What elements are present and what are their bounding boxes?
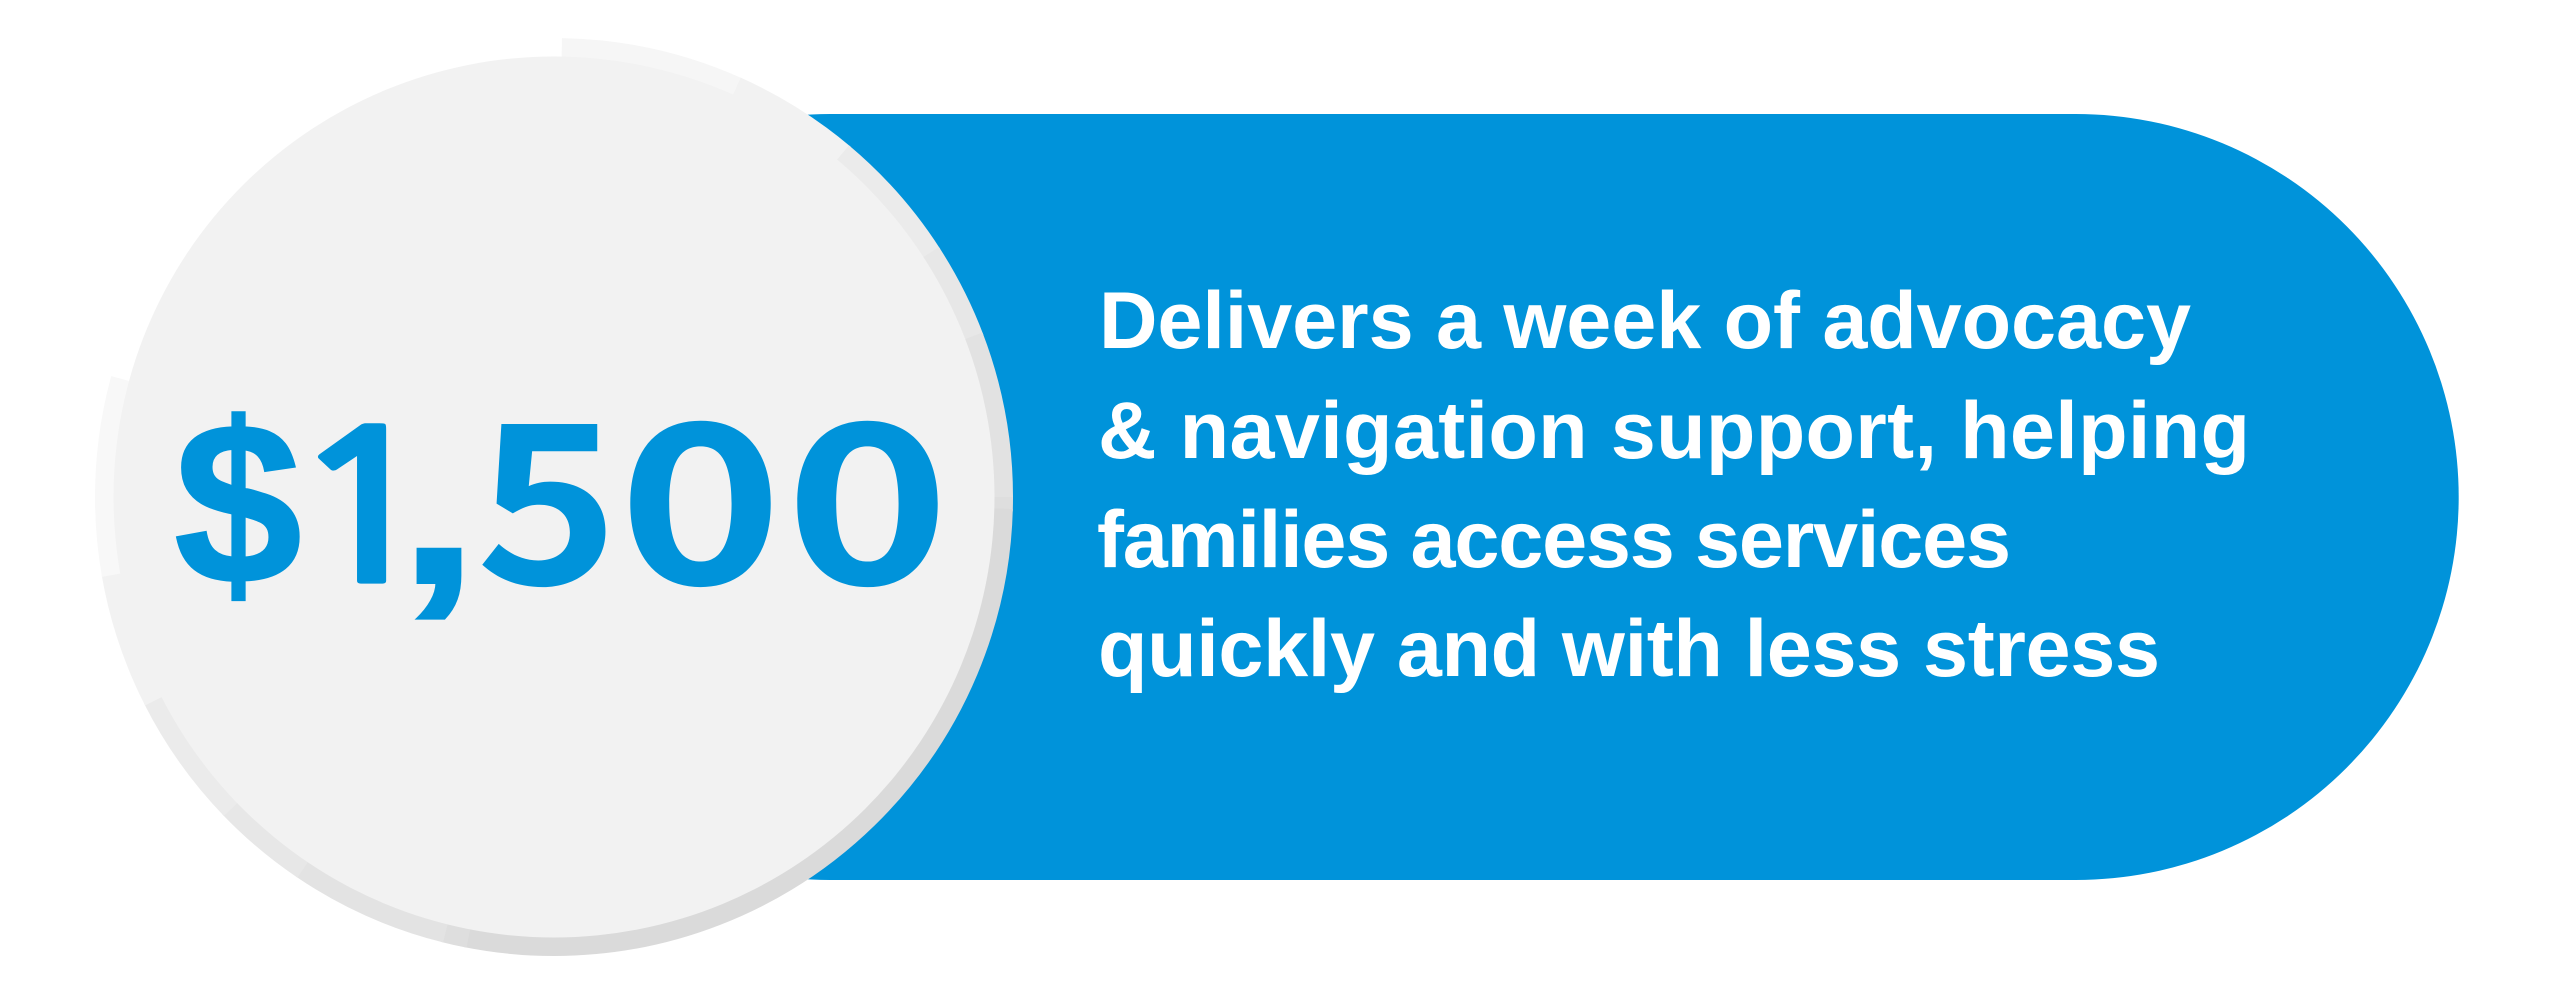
line 3: families access services bbox=[1097, 495, 2011, 585]
amount bbox=[174, 326, 950, 648]
panel: blue pill bbox=[447, 114, 2459, 880]
line 1: Delivers a week of advocacy bbox=[1099, 276, 2191, 366]
panel: amount circle bbox=[104, 48, 1004, 946]
amount: , bbox=[397, 375, 480, 632]
circle face bbox=[114, 56, 994, 938]
amount: 0 bbox=[618, 326, 783, 648]
line 2: & navigation support, helping bbox=[1098, 386, 2250, 476]
circle faceted ring bbox=[104, 48, 1004, 946]
amount: $ bbox=[174, 375, 302, 632]
amount: 5 bbox=[476, 326, 619, 648]
line 4: quickly and with less stress bbox=[1098, 604, 2160, 694]
description text bbox=[1097, 276, 2250, 694]
amount: 0 bbox=[785, 326, 950, 648]
amount: 1 bbox=[283, 407, 448, 615]
